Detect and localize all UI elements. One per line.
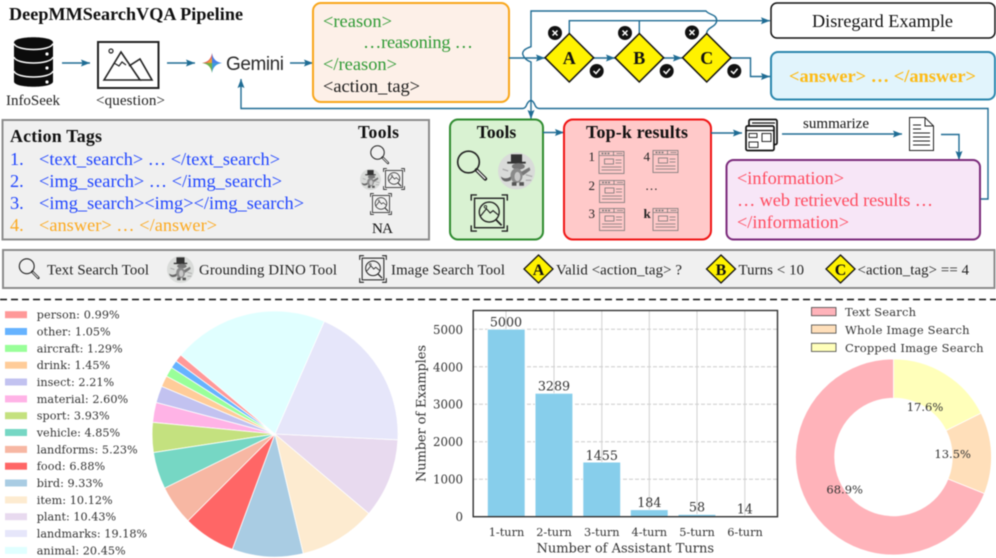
pie legend: plant: 10.43% [37,511,117,524]
decision: B [615,34,664,82]
panel: top-k results: Top-k results [586,122,688,142]
bar chart: assistant turns [414,310,778,556]
panel: information: … web retrieved results … [737,190,933,210]
x axis ticks: 4-turn [632,526,667,539]
panel: reasoning output: <reason> [323,11,392,31]
panel: information: <information> [737,168,844,188]
legend item: C [826,255,970,283]
panel: top-k results: … [645,178,658,193]
decision: A [545,34,594,82]
legend item: text search tool [19,259,149,278]
y axis ticks: 3000 [433,398,463,412]
legend item: C: <action_tag> == 4 [858,262,970,278]
legend item: grounding DINO tool: Grounding DINO Tool [199,262,337,278]
panel: tools [450,120,543,240]
panel: action tags: <answer> … </answer> [39,215,217,235]
pie chart: categories [152,311,398,557]
legend item: C: C [835,262,846,279]
donut legend: Cropped Image Search [845,341,984,355]
pie legend: insect: 2.21% [37,376,115,389]
panel: action tags [2,120,429,240]
panel: action tags: 2. [10,171,24,191]
icon: web pages [746,120,777,150]
bar value labels [490,314,753,516]
y axis ticks: 2000 [433,435,463,449]
decision: B: B [633,48,645,68]
panel: action tags: 4. [10,215,24,235]
panel: tools: Tools [477,122,516,142]
panel: action tags: <img_search><img></img_search> [39,193,304,213]
x axis ticks: 2-turn [536,526,572,539]
donut legend: Text Search [845,305,917,319]
bar value labels: 3289 [538,378,570,394]
panel: action tags: Tools [358,122,399,142]
panel: action tags: Action Tags [10,126,102,146]
pie legend: item: 10.12% [37,494,113,507]
arrow: summarize [782,116,902,134]
panel: top-k results: 1 [588,149,595,164]
panel: action tags: 3. [10,193,24,213]
panel: action tags: <img_search> … </img_search> [39,171,282,191]
arrow: A to B [594,57,615,59]
decision: C [682,34,731,82]
legend item: B: B [716,262,727,279]
pie legend: bird: 9.33% [37,477,104,490]
icon: document [910,118,934,150]
pie legend: material: 2.60% [37,393,129,406]
arrow: database to question [62,62,90,64]
legend item: image search tool [360,256,505,282]
legend item: B: Turns < 10 [738,262,804,278]
y axis ticks: 0 [455,510,463,524]
box: disregard example: Disregard Example [812,11,953,31]
legend item: A: A [533,262,545,279]
arrow: fail to disregard [569,21,770,33]
donut chart: search types: 17.6% [907,400,943,414]
icon: Gemini star [202,53,222,73]
panel: information [726,160,980,240]
panel: reasoning output [313,3,509,102]
pie legend: landmarks: 19.18% [37,528,148,540]
icon: question image [98,42,158,88]
legend item: A [524,255,682,283]
donut legend [812,305,984,355]
panel: top-k results: 3 [588,206,595,221]
pie legend: animal: 20.45% [37,544,126,557]
panel: reasoning output: …reasoning … [363,32,473,52]
arrow: tools to results [543,132,564,134]
pie legend: drink: 1.45% [37,359,111,372]
arrow: summarize: summarize [803,116,869,132]
label: Gemini: Gemini [226,54,284,75]
panel: top-k results [564,120,711,240]
bar value labels: 184 [637,495,661,510]
pie legend: other: 1.05% [37,326,111,338]
x axis ticks: 1-turn [489,526,524,539]
y axis ticks: 4000 [433,360,463,374]
label: question: <question> [96,93,165,109]
pie legend: aircraft: 1.29% [37,342,123,355]
panel: action tags: 1. [10,149,24,169]
y axis ticks [433,323,463,524]
pie legend [5,309,148,557]
y axis title: Number of Examples [414,345,430,482]
pie legend: landforms: 5.23% [37,443,138,456]
x axis ticks [489,526,763,539]
panel: information: </information> [737,212,849,232]
icons: check badges [590,64,741,78]
title: DeepMMSearchVQA Pipeline [9,4,243,24]
legend item: text search tool: Text Search Tool [47,262,149,278]
arrow: results to web pages [711,132,742,134]
pie legend: vehicle: 4.85% [36,426,121,440]
panel: reasoning output: <action_tag> [323,76,420,96]
donut legend: Whole Image Search [845,323,970,337]
donut chart: search types [795,359,991,555]
arrow: reasoning to A [509,57,545,59]
icons: cross badges [548,26,699,40]
pie legend: food: 6.88% [37,460,106,473]
arrow: C to answer [731,58,770,76]
donut chart: search types: 68.9% [826,482,863,496]
panel: action tags: NA [372,221,393,237]
legend item: B [706,255,804,283]
y axis ticks: 1000 [433,473,463,487]
x axis ticks: 6-turn [727,526,763,539]
panel: top-k results: k [644,206,652,221]
arrow: B to C [664,57,682,59]
arrow: C fail to tools [523,11,717,119]
x axis ticks: 5-turn [679,526,715,539]
panel: top-k results: 4 [644,149,650,164]
decision: C: C [700,48,713,68]
arrow: feedback to Gemini [241,79,988,199]
panel: legend bar [3,250,994,288]
panel: action tags: <text_search> … </text_search> [39,149,280,169]
legend item: grounding DINO tool [167,256,337,283]
panel: top-k results: 2 [588,178,595,193]
pie legend: sport: 3.93% [37,410,110,423]
arrow: document to information [941,134,959,160]
box: disregard example [771,3,995,38]
legend item: A: Valid <action_tag> ? [556,262,682,278]
panel: reasoning output: </reason> [323,54,397,74]
donut chart: search types: 13.5% [934,447,971,461]
arrow: question to Gemini [167,62,195,64]
decision: A: A [563,48,576,68]
legend item: image search tool: Image Search Tool [391,262,505,278]
bar value labels: 5000 [490,314,522,330]
x axis ticks: 3-turn [584,526,620,539]
pie legend: person: 0.99% [37,309,120,322]
box: answer: <answer> … </answer> [789,66,976,86]
label: InfoSeek: InfoSeek [6,93,60,109]
x axis title: Number of Assistant Turns [536,542,714,556]
arrow: Gemini to reasoning [290,62,313,64]
box: answer [771,52,995,100]
icon: database InfoSeek [14,37,53,87]
bar value labels: 1455 [586,448,618,463]
y axis ticks: 5000 [433,323,463,337]
bar value labels: 58 [689,500,705,514]
bar value labels: 14 [737,502,753,516]
